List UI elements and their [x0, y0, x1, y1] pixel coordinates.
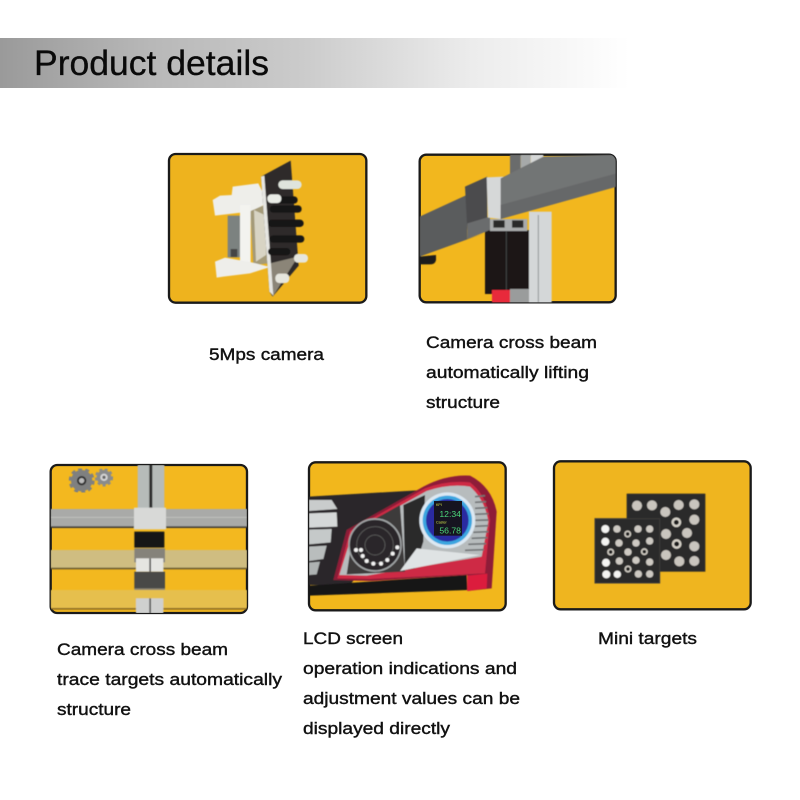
caption: camera cross beam lifting: automatically lifting	[426, 363, 589, 382]
icon: rear target	[627, 494, 705, 572]
LCD display: 12:34	[439, 509, 461, 519]
caption: cross beam trace targets: structure	[57, 700, 131, 719]
caption: mini targets: Mini targets	[598, 629, 697, 648]
panel: camera cross beam lifting	[420, 155, 617, 303]
icon: front target	[595, 519, 660, 583]
caption: LCD screen: adjustment values can be	[303, 689, 520, 708]
caption: 5Mps camera: 5Mps camera	[209, 345, 325, 364]
caption: cross beam trace targets: trace targets automatically	[57, 670, 283, 689]
LCD display: KPI	[436, 503, 442, 507]
title: Product details	[34, 44, 269, 83]
caption: cross beam trace targets: Camera cross beam	[57, 640, 228, 659]
LCD display: 56.78	[439, 526, 461, 536]
caption: cross beam trace targets	[57, 640, 283, 719]
header banner	[0, 38, 630, 88]
caption: LCD screen: displayed directly	[303, 719, 451, 738]
caption: LCD screen: LCD screen	[303, 629, 403, 648]
panel: LCD screen	[309, 462, 506, 610]
LCD display: Caster	[436, 520, 448, 524]
panel: cross beam trace targets	[51, 465, 247, 613]
icon: gears	[71, 470, 111, 491]
caption: LCD screen: operation indications and	[303, 659, 517, 678]
caption: camera cross beam lifting: Camera cross beam	[426, 333, 597, 352]
caption: camera cross beam lifting	[426, 333, 597, 412]
caption: LCD screen	[303, 629, 520, 738]
LCD display	[434, 501, 462, 536]
caption: camera cross beam lifting: structure	[426, 393, 500, 412]
panel: mini targets	[554, 461, 751, 609]
panel: 5Mps camera	[169, 154, 366, 303]
